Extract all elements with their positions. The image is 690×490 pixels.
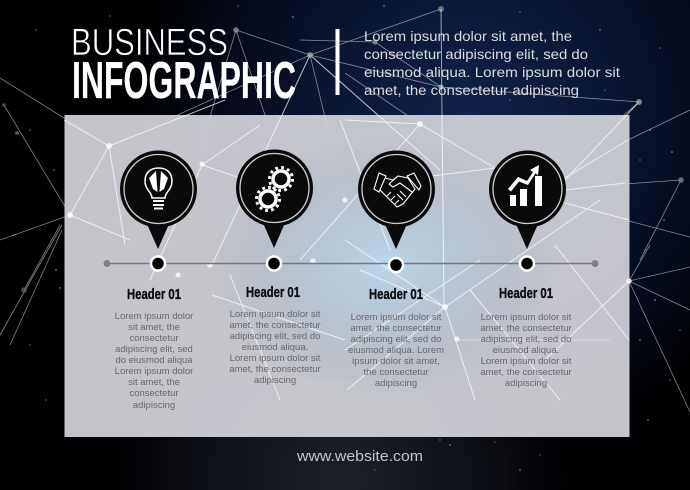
title (71, 22, 296, 110)
body text 4: adipiscing (505, 378, 547, 389)
pin marker 1 with lightbulb icon (120, 150, 197, 249)
body text 4: eiusmod aliqua. (493, 345, 559, 356)
network of connected lines: over panel (64, 55, 639, 400)
body text 2: adipiscing (254, 375, 296, 386)
body text 1: sit amet, the (128, 377, 180, 388)
body text 1: sit amet, the (128, 322, 180, 333)
column 1 text (115, 286, 193, 411)
body text 2: eiusmod aliqua. (242, 342, 308, 353)
icon: two gears (256, 168, 292, 210)
body text 3: adipiscing elit, sed do (351, 334, 441, 345)
vertical network line from top (441, 9, 442, 115)
intro paragraph: consectetur adipiscing elit, sed do (364, 46, 588, 62)
body text 3: adipiscing (375, 378, 417, 389)
intro paragraph (364, 28, 620, 98)
body text 4: amet, the consectetur (480, 323, 572, 334)
column 4 text (480, 285, 572, 389)
body text 1: consectetur (129, 333, 179, 344)
column 2 text (229, 284, 321, 386)
body text 1: adipiscing elit, sed (115, 344, 193, 355)
header 1: Header 01 (127, 286, 181, 303)
body text 2: adipiscing elit, sed do (230, 331, 320, 342)
body text 4: Lorem ipsum dolor sit (481, 312, 572, 323)
body text 1: do eiusmod aliqua (115, 355, 193, 366)
pin marker 3 with handshake icon (358, 150, 435, 249)
body text 2: Lorem ipsum dolor sit (230, 309, 321, 320)
translucent content panel (64, 115, 630, 437)
body text 3: amet, the consectetur (350, 323, 442, 334)
body text 4: Lorem ipsum dolor sit (481, 356, 572, 367)
network nodes (2, 6, 684, 342)
icon: bar chart with rising arrow (508, 165, 542, 206)
intro paragraph: eiusmod aliqua. Lorem ipsum dolor sit (364, 64, 620, 80)
body text 1: adipiscing (133, 400, 175, 411)
earth glow seen through panel (210, 135, 560, 395)
body text 3: ipsum dolor sit amet, (352, 356, 440, 367)
body text 4 (480, 312, 572, 389)
vertical divider bar (336, 29, 340, 95)
body text 1: consectetur (129, 388, 179, 399)
icon: brain lightbulb (145, 168, 172, 208)
header 4: Header 01 (499, 285, 553, 302)
title line: BUSINESS: BUSINESS (71, 22, 228, 64)
body text 2: Lorem ipsum dolor sit (230, 353, 321, 364)
title line: INFOGRAPHIC: INFOGRAPHIC (72, 52, 296, 110)
body text 2 (229, 309, 321, 386)
column 3 text (348, 286, 444, 389)
intro paragraph: amet, the consectetur adipiscing (364, 82, 579, 98)
header 2: Header 01 (246, 284, 300, 301)
website footer: www.website.com (296, 449, 423, 465)
icon: handshake (374, 173, 421, 207)
pin marker 2 with gears icon (236, 150, 313, 248)
intro paragraph: Lorem ipsum dolor sit amet, the (364, 28, 572, 44)
body text 1: Lorem ipsum dolor (115, 366, 193, 377)
body text 3 (348, 312, 444, 389)
body text 2: amet, the consectetur (229, 364, 321, 375)
body text 4: amet, the consectetur (480, 367, 572, 378)
header 3: Header 01 (369, 286, 423, 303)
body text 3: eiusmod aliqua. Lorem (348, 345, 444, 356)
body text 4: adipiscing elit, sed do (481, 334, 571, 345)
body text 3: Lorem ipsum dolor sit (351, 312, 442, 323)
body text 2: amet, the consectetur (229, 320, 321, 331)
body text 1 (115, 311, 193, 411)
body text 1: Lorem ipsum dolor (115, 311, 193, 322)
body text 3: the consectetur (364, 367, 428, 378)
pin marker 4 with growth chart icon (489, 150, 566, 249)
timeline (104, 256, 598, 272)
